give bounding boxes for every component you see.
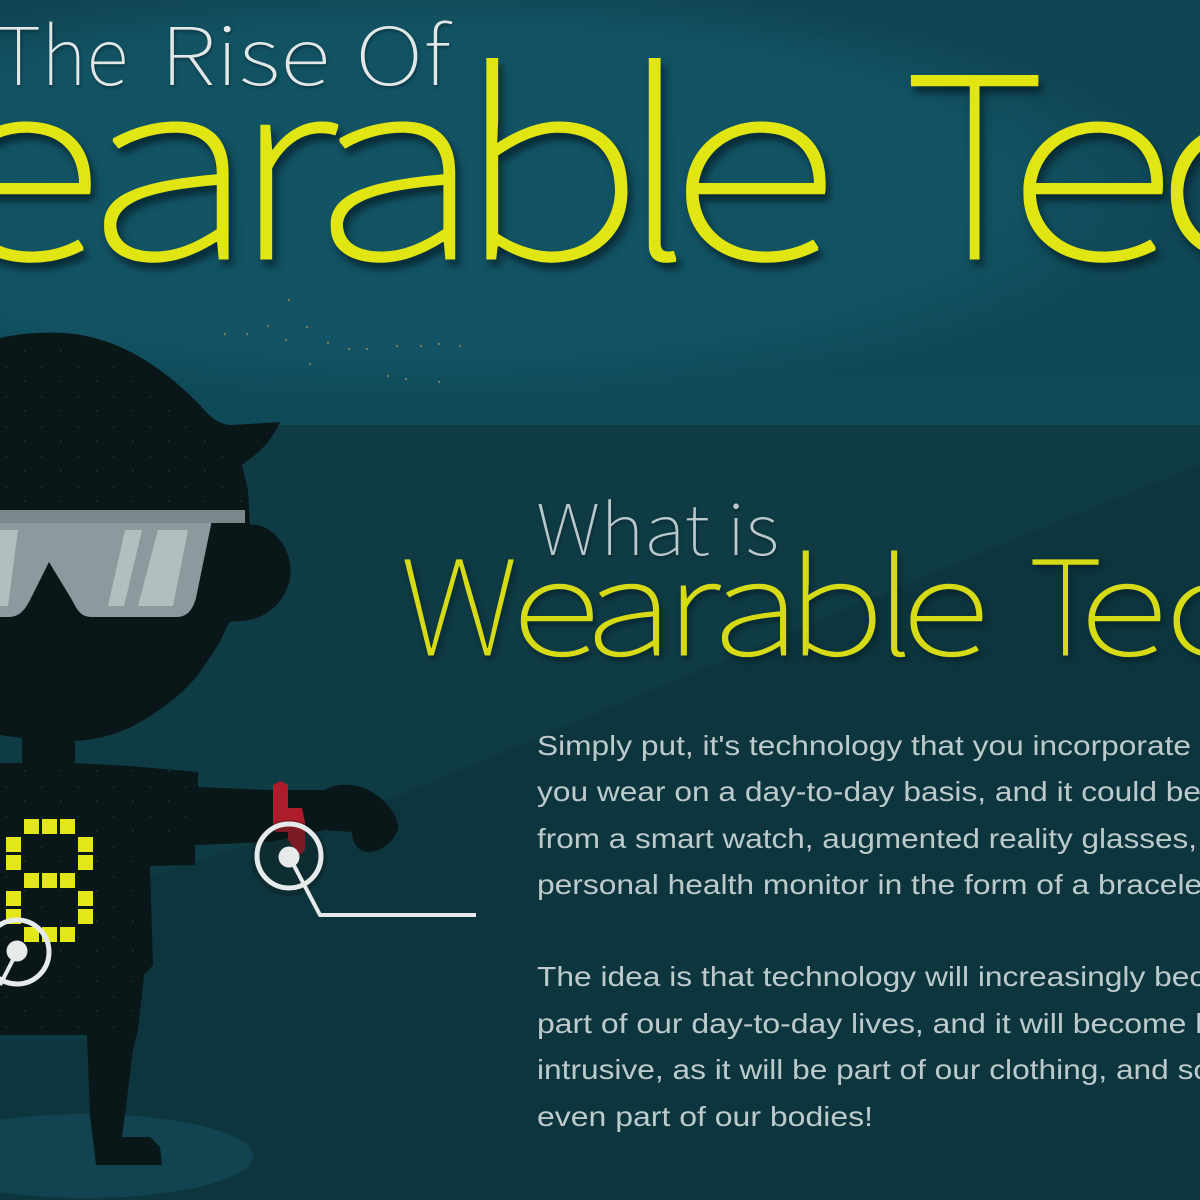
- body text: paragraph two: The idea is that technology will increasingly become: [537, 961, 1200, 992]
- heading: Wearable Tech: W: [400, 503, 519, 693]
- glasses lens: [0, 520, 212, 617]
- body text: paragraph one: Simply put, it's technology that you incorporate: [537, 730, 1191, 761]
- body text: paragraph one: [537, 730, 1200, 900]
- silhouette specks: [0, 341, 245, 1030]
- body text: paragraph two: intrusive, as it will be part of our clothing, and some: [537, 1054, 1200, 1085]
- heading: What is: What is: [536, 475, 779, 576]
- yellow LED number 8: [6, 819, 93, 942]
- glasses top bar: [0, 510, 245, 523]
- body text: paragraph one: personal health monitor in the form of a bracelet: [537, 869, 1200, 900]
- character silhouette: [0, 333, 398, 1165]
- body text: paragraph one: from a smart watch, augmented reality glasses,: [537, 823, 1197, 854]
- decorative star dots: [224, 299, 461, 383]
- callout marker: torso: [0, 920, 49, 985]
- lens highlights: [0, 530, 188, 606]
- body text: paragraph two: [537, 961, 1200, 1132]
- character illustration: [0, 333, 398, 1165]
- heading: Wearable Tech: earable: [511, 503, 989, 693]
- sunglasses: [0, 510, 245, 617]
- body text: paragraph two: part of our day-to-day lives, and it will become less: [537, 1008, 1200, 1039]
- body text: paragraph one: you wear on a day-to-day basis, and it could be: [537, 776, 1200, 807]
- body text: paragraph two: even part of our bodies!: [537, 1101, 873, 1132]
- heading: Wearable Tech: T: [1028, 503, 1103, 693]
- red wristband: [273, 781, 305, 856]
- ground shadow ellipse: [0, 1114, 253, 1198]
- callout marker: wristband: [251, 820, 476, 915]
